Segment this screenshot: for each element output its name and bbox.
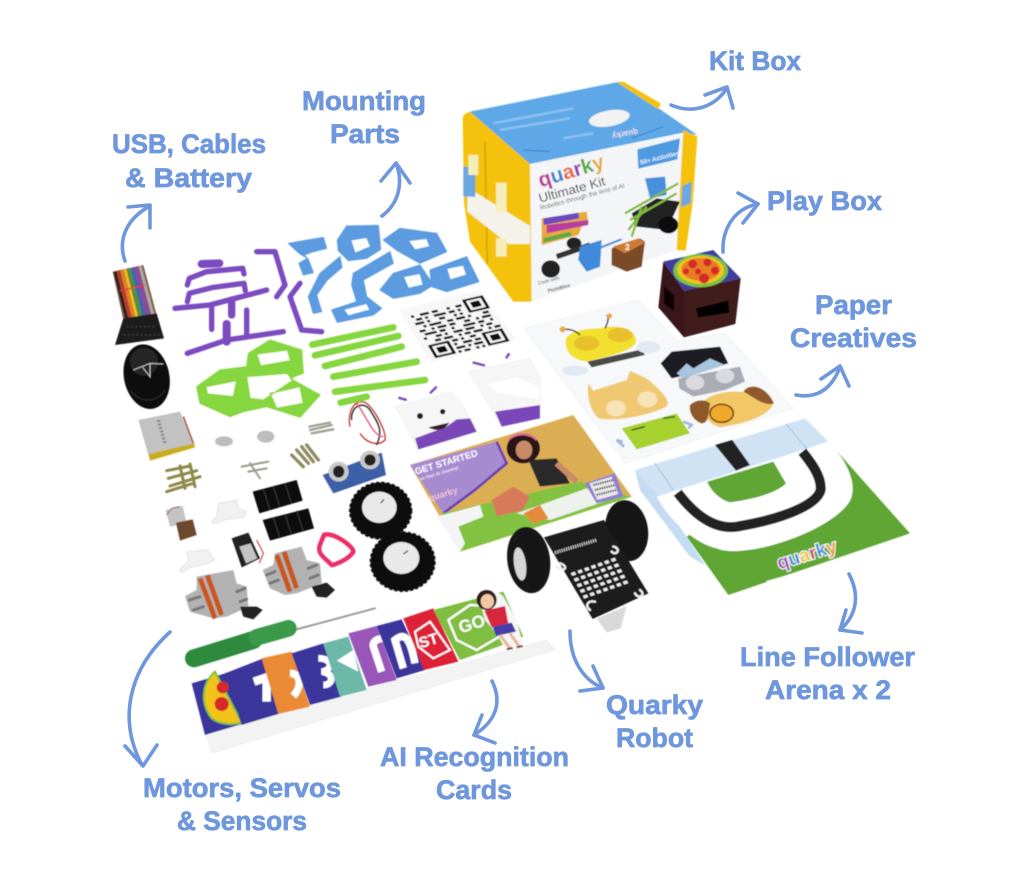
- arrow: USB, Cables & Battery: [122, 205, 150, 261]
- screwdriver: [194, 608, 375, 658]
- white brackets: [179, 500, 247, 573]
- purple parts: [175, 252, 322, 353]
- wheel 2: [371, 532, 435, 591]
- arrow: Motors, Servos & Sensors: [125, 632, 170, 766]
- box front label: 50+ Activities: [639, 150, 681, 167]
- label: Paper Creatives: Paper: [815, 290, 892, 320]
- get started card: GET STARTED: [414, 448, 479, 477]
- label: Motors, Servos & Sensors: & Sensors: [177, 806, 307, 836]
- printed car: [541, 237, 622, 278]
- label: Quarky Robot: [606, 690, 703, 753]
- quarky robot: [503, 497, 652, 632]
- left wheel: [503, 524, 554, 596]
- rubber tubes: [253, 480, 314, 541]
- arrow: Kit Box: [671, 87, 733, 109]
- servo 1: [185, 570, 263, 619]
- right wheel: [601, 497, 652, 564]
- robot mask: [661, 347, 745, 397]
- box front label: Ultimate Kit: [537, 174, 607, 206]
- bee mask: [560, 313, 660, 376]
- QR card: [399, 290, 516, 362]
- ball caster: [597, 606, 627, 632]
- mounting parts: [175, 225, 540, 449]
- jumper wires: [349, 402, 385, 445]
- box left yellow side: [463, 112, 533, 302]
- ribbon cable: [113, 265, 164, 345]
- label: AI Recognition Cards: Cards: [436, 775, 512, 805]
- line follower arena: quarky: [774, 535, 840, 573]
- green frames: [197, 340, 320, 417]
- circuit board: [544, 520, 648, 619]
- label: USB, Cables & Battery: USB, Cables: [112, 129, 266, 159]
- get started card: quarky: [428, 485, 459, 503]
- frog mask: [622, 413, 690, 449]
- rubber band: [319, 535, 353, 565]
- card: 3: [292, 643, 342, 705]
- label: USB, Cables & Battery: & Battery: [125, 163, 252, 193]
- label: Line Follower Arena x 2: Line Follower: [740, 642, 915, 672]
- card: stop: ST: [417, 630, 441, 652]
- card: 2: [262, 652, 310, 714]
- code with PictoBlox: Code with: [537, 275, 560, 287]
- arrow: Paper Creatives: [796, 366, 849, 396]
- label: AI Recognition Cards: [380, 742, 569, 805]
- cable coil: [118, 340, 176, 413]
- card: pizza: [192, 670, 250, 735]
- label: Kit Box: Kit Box: [709, 46, 801, 76]
- label: Paper Creatives: [790, 290, 917, 353]
- product layout: all kit components: [113, 82, 910, 753]
- AI recognition cards and screwdriver: [192, 590, 555, 753]
- card: girl figure: [477, 590, 523, 652]
- wheel 1: [350, 483, 411, 539]
- gear motor 2: [232, 533, 263, 567]
- arrow: Quarky Robot: [570, 631, 603, 691]
- card: navy r: [377, 619, 425, 678]
- get started card: [410, 415, 632, 552]
- dog mask: [704, 392, 773, 427]
- label: Mounting Parts: [302, 86, 426, 149]
- label: Mounting Parts: Mounting: [302, 86, 426, 116]
- printed rover: [625, 177, 680, 237]
- paper creatives sheets: [523, 300, 793, 463]
- small parts area: [113, 265, 435, 619]
- card: go: GO: [456, 610, 488, 637]
- arrow: Play Box: [723, 193, 758, 252]
- label: Line Follower Arena x 2: Arena x 2: [765, 675, 891, 705]
- box front label: PictoBlox: [547, 283, 571, 295]
- cat mask: [588, 371, 668, 419]
- printed play box: [612, 238, 645, 272]
- label: Quarky Robot: Quarky: [606, 690, 703, 720]
- label: Mounting Parts: Parts: [330, 119, 400, 149]
- label: AI Recognition Cards: AI Recognition: [380, 742, 569, 772]
- servo 2: [263, 547, 335, 598]
- face mask: back frame: [468, 353, 540, 427]
- box right yellow side: [677, 130, 697, 251]
- card: stop: [403, 608, 458, 670]
- green long bars: [312, 327, 425, 403]
- box front label: quarky: [535, 150, 607, 192]
- get started card: on Your AI Journey!: [419, 465, 460, 482]
- code blocks: [542, 212, 588, 245]
- blue parts: [288, 225, 479, 322]
- arrow: Line Follower Arena: [840, 574, 862, 633]
- card base strip: [205, 640, 555, 753]
- box top: [470, 82, 697, 164]
- label: Paper Creatives: Creatives: [790, 323, 917, 353]
- label: Motors, Servos & Sensors: [143, 773, 341, 836]
- label: Line Follower Arena x 2: [740, 642, 915, 705]
- arrow: Mounting Parts: [381, 163, 410, 216]
- arrow: AI Recognition Cards: [474, 681, 497, 743]
- face mask: robot face: [395, 387, 477, 449]
- label: Motors, Servos & Sensors: Motors, Servos: [143, 773, 341, 803]
- box front label: Robotics through the lens of AI: [539, 183, 626, 212]
- play box: [658, 250, 741, 337]
- ultrasonic sensor: [323, 451, 386, 493]
- label: USB, Cables & Battery: [112, 129, 266, 193]
- card: purple: [348, 626, 397, 687]
- box front label: [530, 133, 683, 302]
- card: arrow: [323, 637, 367, 697]
- label: Play Box: Play Box: [767, 186, 882, 216]
- card: 1: [225, 658, 281, 725]
- printed play box: 2: [625, 242, 630, 252]
- battery: [138, 412, 195, 461]
- kit box: [463, 82, 697, 302]
- card: go: [433, 592, 523, 660]
- box top: quarky: [611, 127, 639, 141]
- line follower arena: [635, 418, 910, 595]
- screws and nuts: [167, 423, 333, 492]
- label: Quarky Robot: Robot: [616, 723, 693, 753]
- gear motor 1: [166, 506, 197, 541]
